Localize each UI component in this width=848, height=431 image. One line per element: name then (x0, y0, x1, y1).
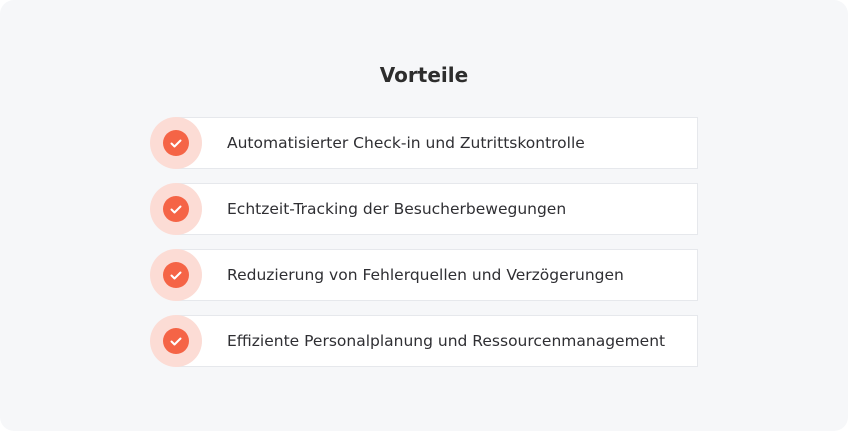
icon: check (150, 249, 202, 301)
row 1 (150, 117, 698, 169)
title: Vorteile (380, 63, 468, 87)
text: Effiziente Personalplanung und Ressourcenmanagement (227, 332, 665, 350)
icon: check (150, 315, 202, 367)
text: Echtzeit-Tracking der Besucherbewegungen (227, 200, 566, 218)
row 3 (150, 249, 698, 301)
row 4 (150, 315, 698, 367)
icon: check (150, 183, 202, 235)
text: Automatisierter Check-in und Zutrittskontrolle (227, 134, 585, 152)
row 2 (150, 183, 698, 235)
icon: check (150, 117, 202, 169)
text: Reduzierung von Fehlerquellen und Verzögerungen (227, 266, 624, 284)
